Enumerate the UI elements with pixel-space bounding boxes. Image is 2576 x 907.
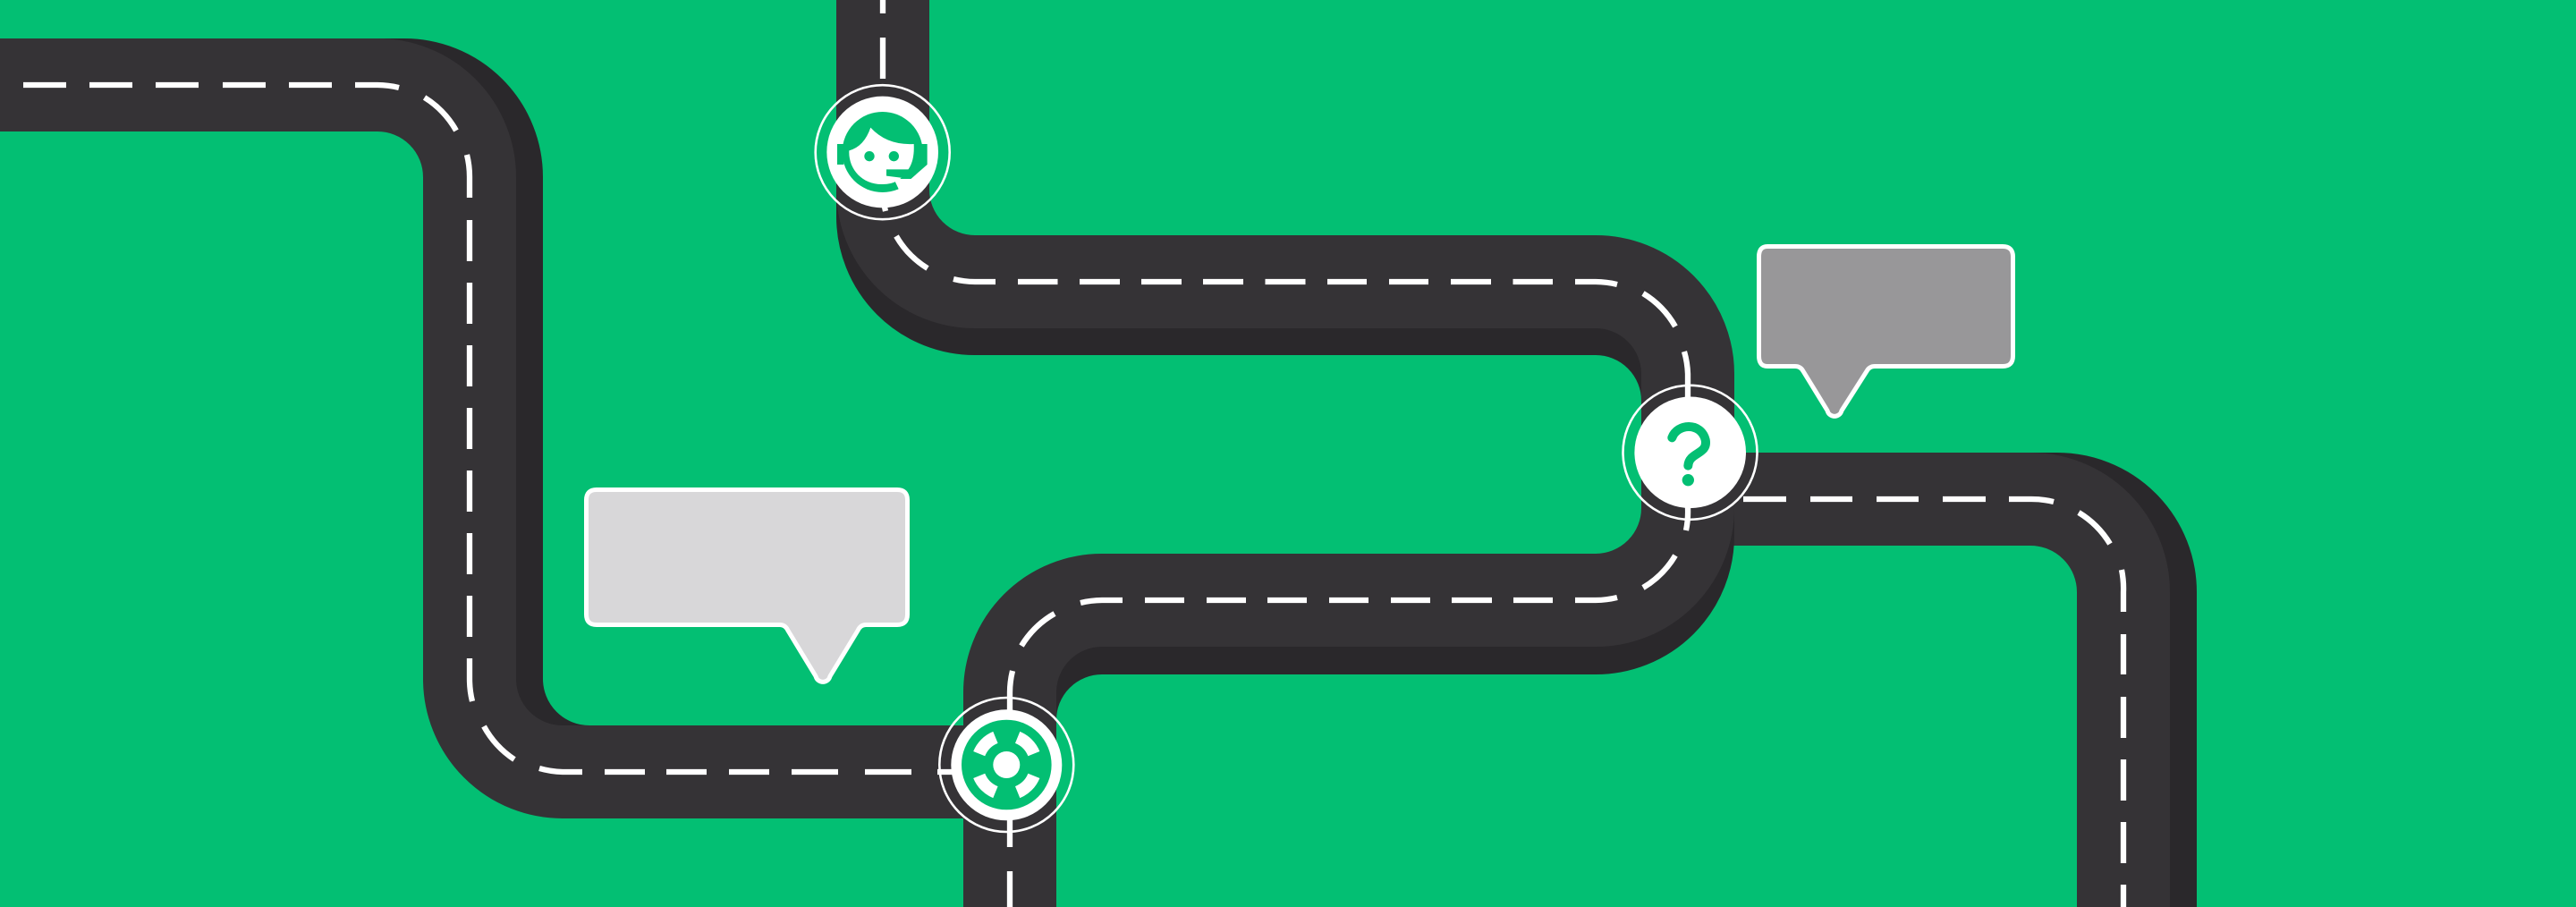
- icon: question mark: [1672, 427, 1706, 486]
- marker: question: [1623, 386, 1757, 520]
- road shadow: left section: [0, 85, 1011, 772]
- lane dashes: central S-curve: [883, 0, 1688, 907]
- road: left section: [0, 85, 1011, 772]
- road shadow: right section: [1690, 499, 2150, 907]
- marker ring: [939, 698, 1073, 832]
- white disc: [951, 709, 1062, 820]
- marker: wheel: [939, 698, 1073, 832]
- lane dashes: left section: [23, 85, 962, 772]
- white disc: [1634, 397, 1746, 508]
- road shadow: central S-curve: [883, 0, 1688, 907]
- marker ring: [816, 85, 950, 219]
- road surface: right section: [1690, 499, 2123, 907]
- road surface: central S-curve: [883, 0, 1688, 907]
- icon: wheel: [962, 720, 1052, 810]
- icon: support agent headset: [826, 97, 938, 208]
- marker: customer support agent: [816, 85, 950, 219]
- speech bubble: light grey: [587, 490, 907, 682]
- road surface: left section: [0, 85, 1011, 772]
- road: central S-curve: [883, 0, 1688, 907]
- road: right section: [1690, 499, 2150, 907]
- lane dashes: right section: [1743, 499, 2123, 907]
- marker ring: [1623, 386, 1757, 520]
- speech bubble: dark grey: [1758, 247, 2012, 416]
